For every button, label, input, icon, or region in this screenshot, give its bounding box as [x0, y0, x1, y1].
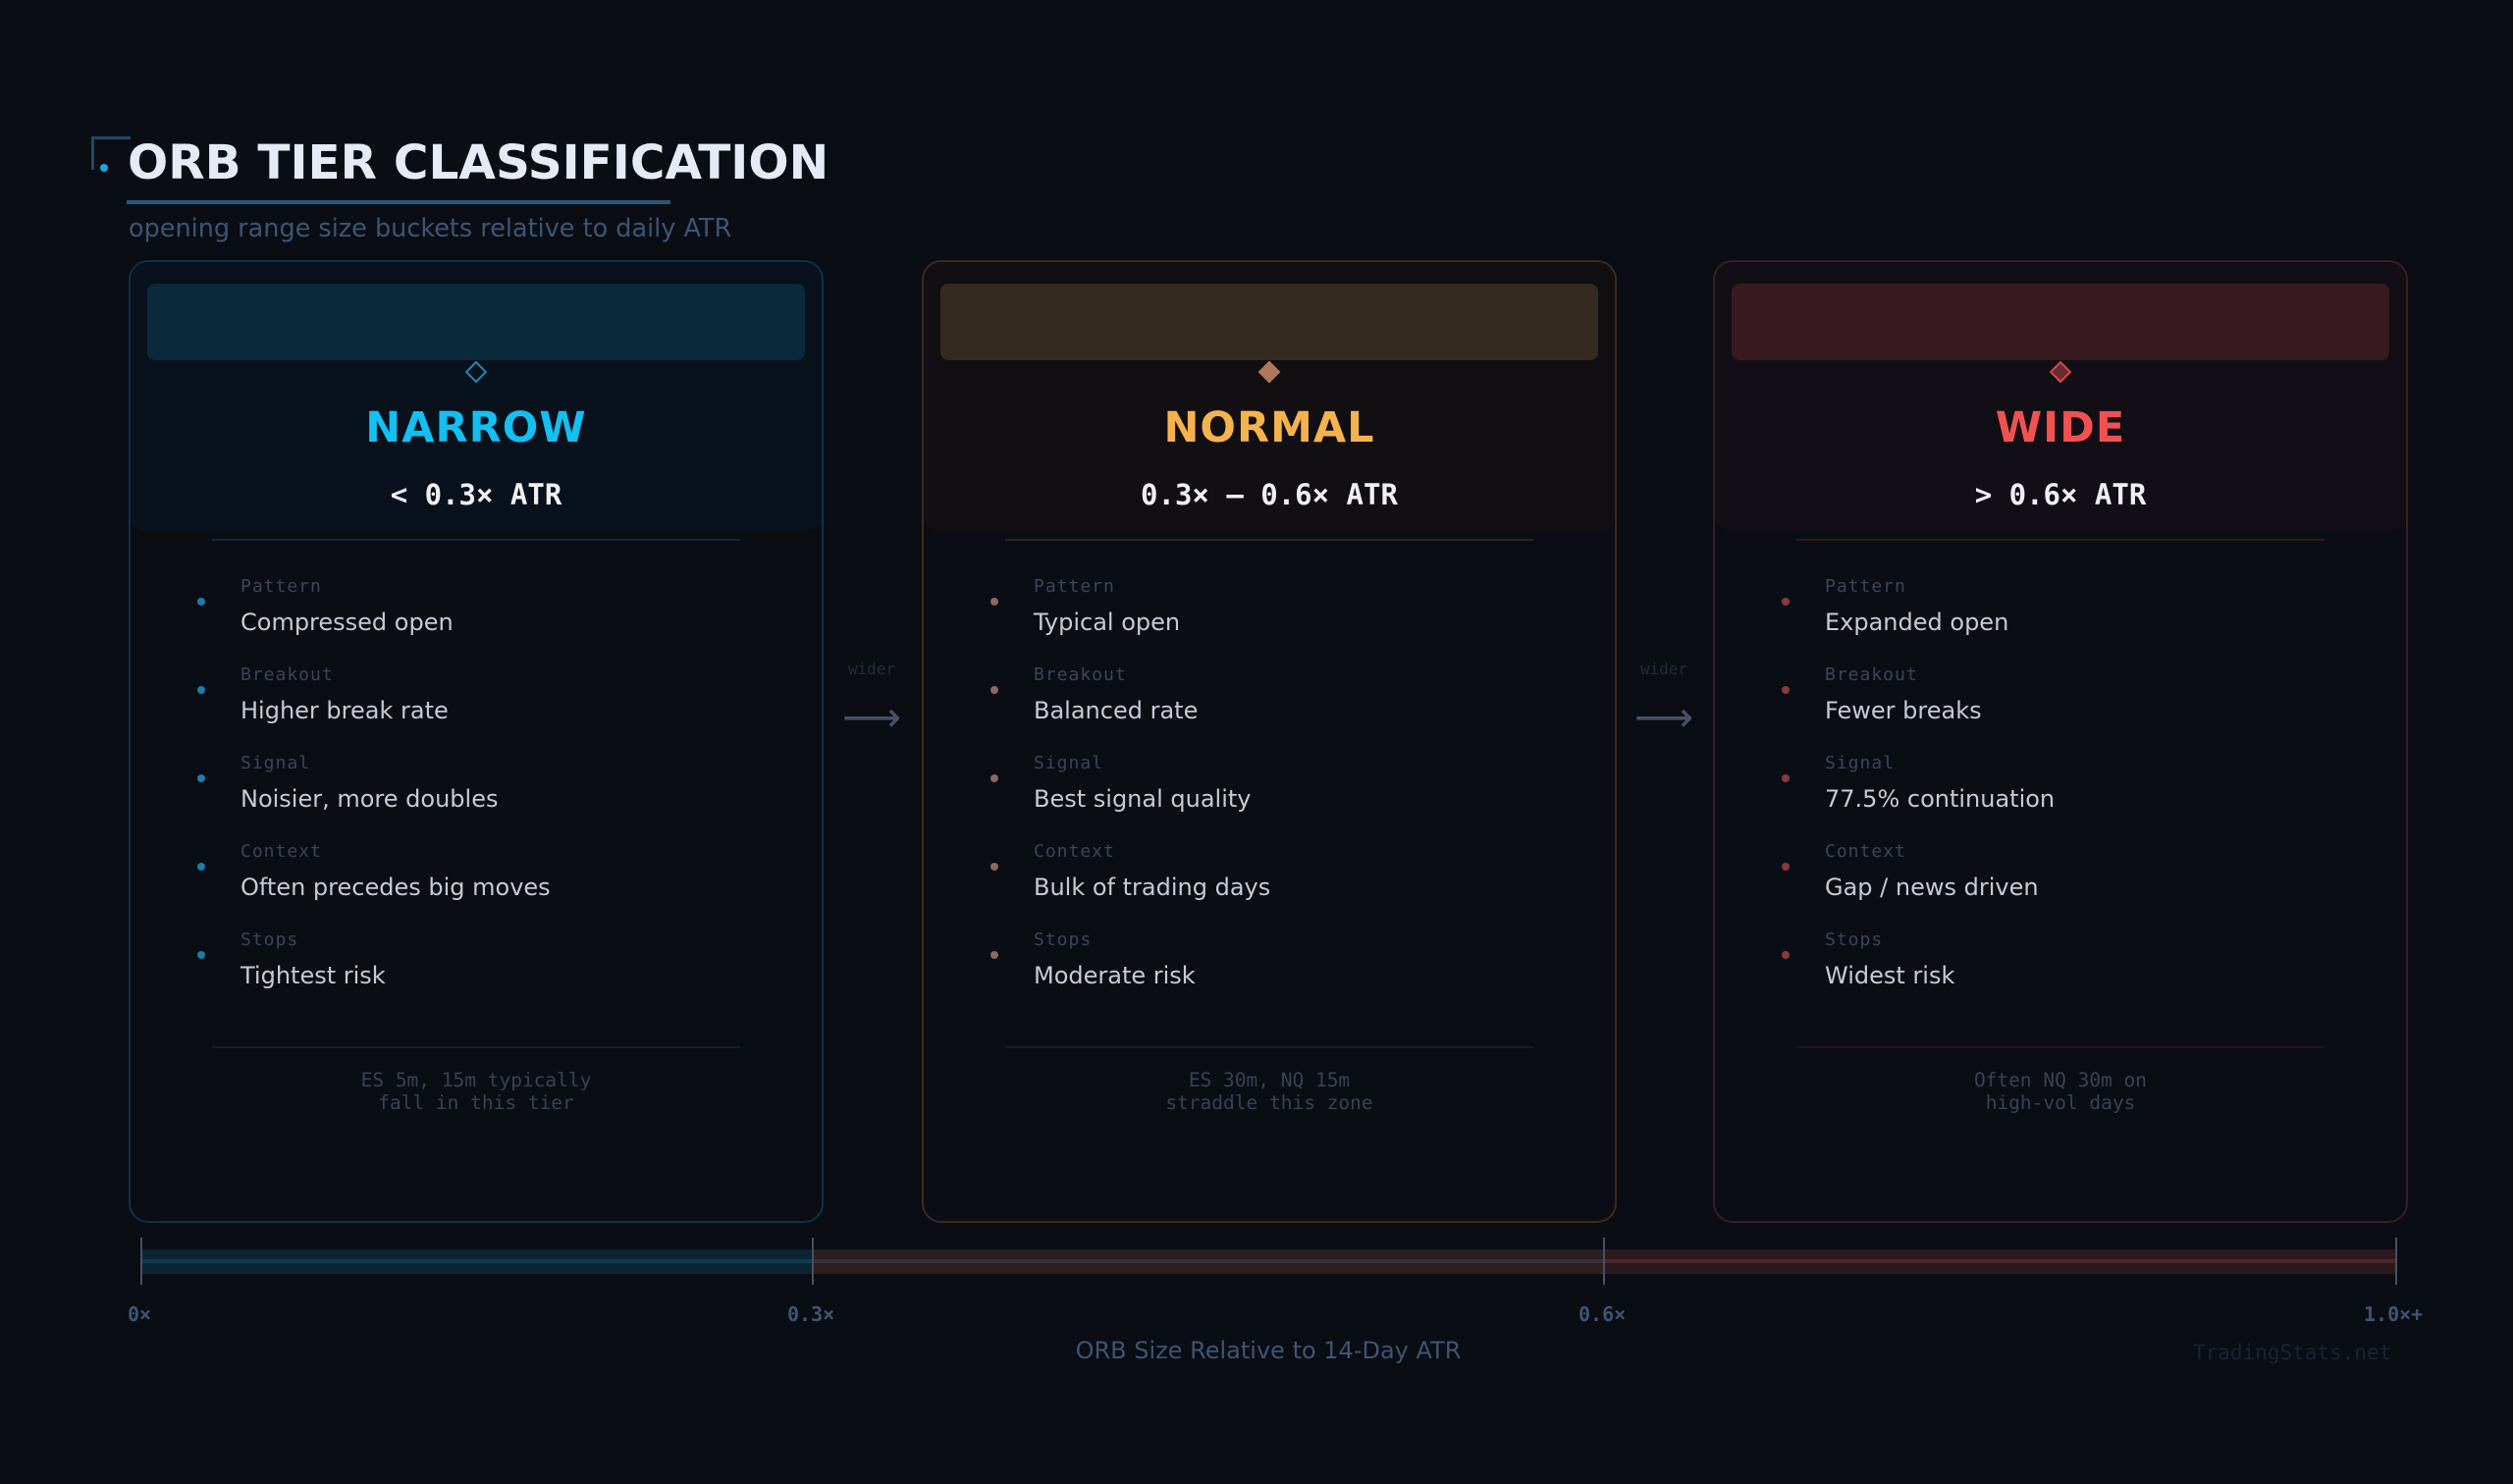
item: pattern: Pattern [1825, 576, 1906, 597]
item: stops [1782, 929, 1955, 989]
item: breakout: Breakout [1034, 664, 1127, 685]
axis labels: 0.6× [1578, 1302, 1626, 1326]
axis title: ORB Size Relative to 14-Day ATR [1076, 1337, 1461, 1364]
item: stops: Moderate risk [1034, 962, 1196, 989]
item: breakout: Higher break rate [241, 697, 449, 724]
item: stops: Stops [1034, 929, 1092, 950]
item: signal: Signal [1034, 753, 1103, 773]
item: breakout [197, 664, 449, 724]
item: signal [1782, 753, 2055, 813]
item: pattern: Pattern [241, 576, 322, 597]
item: pattern: Typical open [1034, 609, 1180, 636]
range: wide: > 0.6× ATR [1975, 478, 2146, 511]
title underline [127, 200, 670, 204]
item: breakout [1782, 664, 1982, 724]
item: context: Often precedes big moves [241, 874, 551, 901]
item: stops: Widest risk [1825, 962, 1954, 989]
note: wide: high-vol days [1986, 1091, 2135, 1114]
item: signal [990, 753, 1251, 813]
watermark: TradingStats.net [2193, 1341, 2391, 1364]
note: narrow: fall in this tier [378, 1091, 574, 1114]
panel: narrow [129, 260, 824, 1223]
item: signal: Noisier, more doubles [241, 785, 498, 813]
item: breakout: Breakout [1825, 664, 1918, 685]
item: context: Context [1034, 841, 1115, 862]
heading: WIDE: WIDE [1996, 403, 2125, 452]
arrow: narrow to normal: wider [848, 660, 895, 678]
note: wide [1974, 1069, 2147, 1114]
item: pattern: Compressed open [241, 609, 454, 636]
item: breakout: Balanced rate [1034, 697, 1198, 724]
arrow: narrow to normal: ⟶ [842, 693, 901, 741]
item: stops [197, 929, 386, 989]
item: context [1782, 841, 2039, 901]
note: narrow: ES 5m, 15m typically [361, 1069, 591, 1091]
note: narrow [361, 1069, 591, 1114]
icon: wide diamond [2050, 361, 2071, 383]
item: stops: Tightest risk [241, 962, 386, 989]
item: context: Gap / news driven [1825, 874, 2039, 901]
item: context [197, 841, 551, 901]
arrow: normal to wide [1634, 660, 1693, 741]
note: normal: ES 30m, NQ 15m [1189, 1069, 1350, 1091]
item: stops [990, 929, 1196, 989]
item: pattern [197, 576, 454, 636]
axis labels: 0× [128, 1302, 151, 1326]
item: signal: 77.5% continuation [1825, 785, 2055, 813]
heading: NARROW: NARROW [365, 403, 587, 452]
arrow: narrow to normal [842, 660, 901, 741]
item: context: Context [241, 841, 322, 862]
range: normal: 0.3× – 0.6× ATR [1141, 478, 1398, 511]
icon: normal diamond [1258, 361, 1280, 383]
item: breakout: Breakout [241, 664, 334, 685]
note: normal: straddle this zone [1165, 1091, 1373, 1114]
item: signal: Signal [1825, 753, 1895, 773]
item: signal: Signal [241, 753, 310, 773]
arrow: normal to wide: wider [1640, 660, 1687, 678]
note: wide: Often NQ 30m on [1974, 1069, 2147, 1091]
panel: wide [1713, 260, 2408, 1223]
range: narrow: < 0.3× ATR [391, 478, 561, 511]
item: pattern: Pattern [1034, 576, 1115, 597]
panel: normal [922, 260, 1617, 1223]
item: signal: Best signal quality [1034, 785, 1251, 813]
item: breakout [990, 664, 1198, 724]
item: context: Bulk of trading days [1034, 874, 1270, 901]
item: pattern: Expanded open [1825, 609, 2008, 636]
heading: NORMAL: NORMAL [1163, 403, 1375, 452]
title bracket icon [91, 136, 131, 172]
axis labels: 1.0×+ [2364, 1302, 2423, 1326]
item: pattern [1782, 576, 2008, 636]
item: pattern [990, 576, 1180, 636]
item: context: Context [1825, 841, 1906, 862]
item: stops: Stops [241, 929, 298, 950]
item: signal [197, 753, 498, 813]
axis bar [142, 1249, 2395, 1274]
item: context [990, 841, 1270, 901]
item: stops: Stops [1825, 929, 1883, 950]
item: breakout: Fewer breaks [1825, 697, 1982, 724]
arrow: normal to wide: ⟶ [1634, 693, 1693, 741]
note: normal [1165, 1069, 1373, 1114]
axis labels: 0.3× [787, 1302, 834, 1326]
title: ORB TIER CLASSIFICATION [128, 135, 829, 190]
subtitle: opening range size buckets relative to daily ATR [129, 214, 731, 243]
icon: narrow diamond [465, 361, 487, 383]
